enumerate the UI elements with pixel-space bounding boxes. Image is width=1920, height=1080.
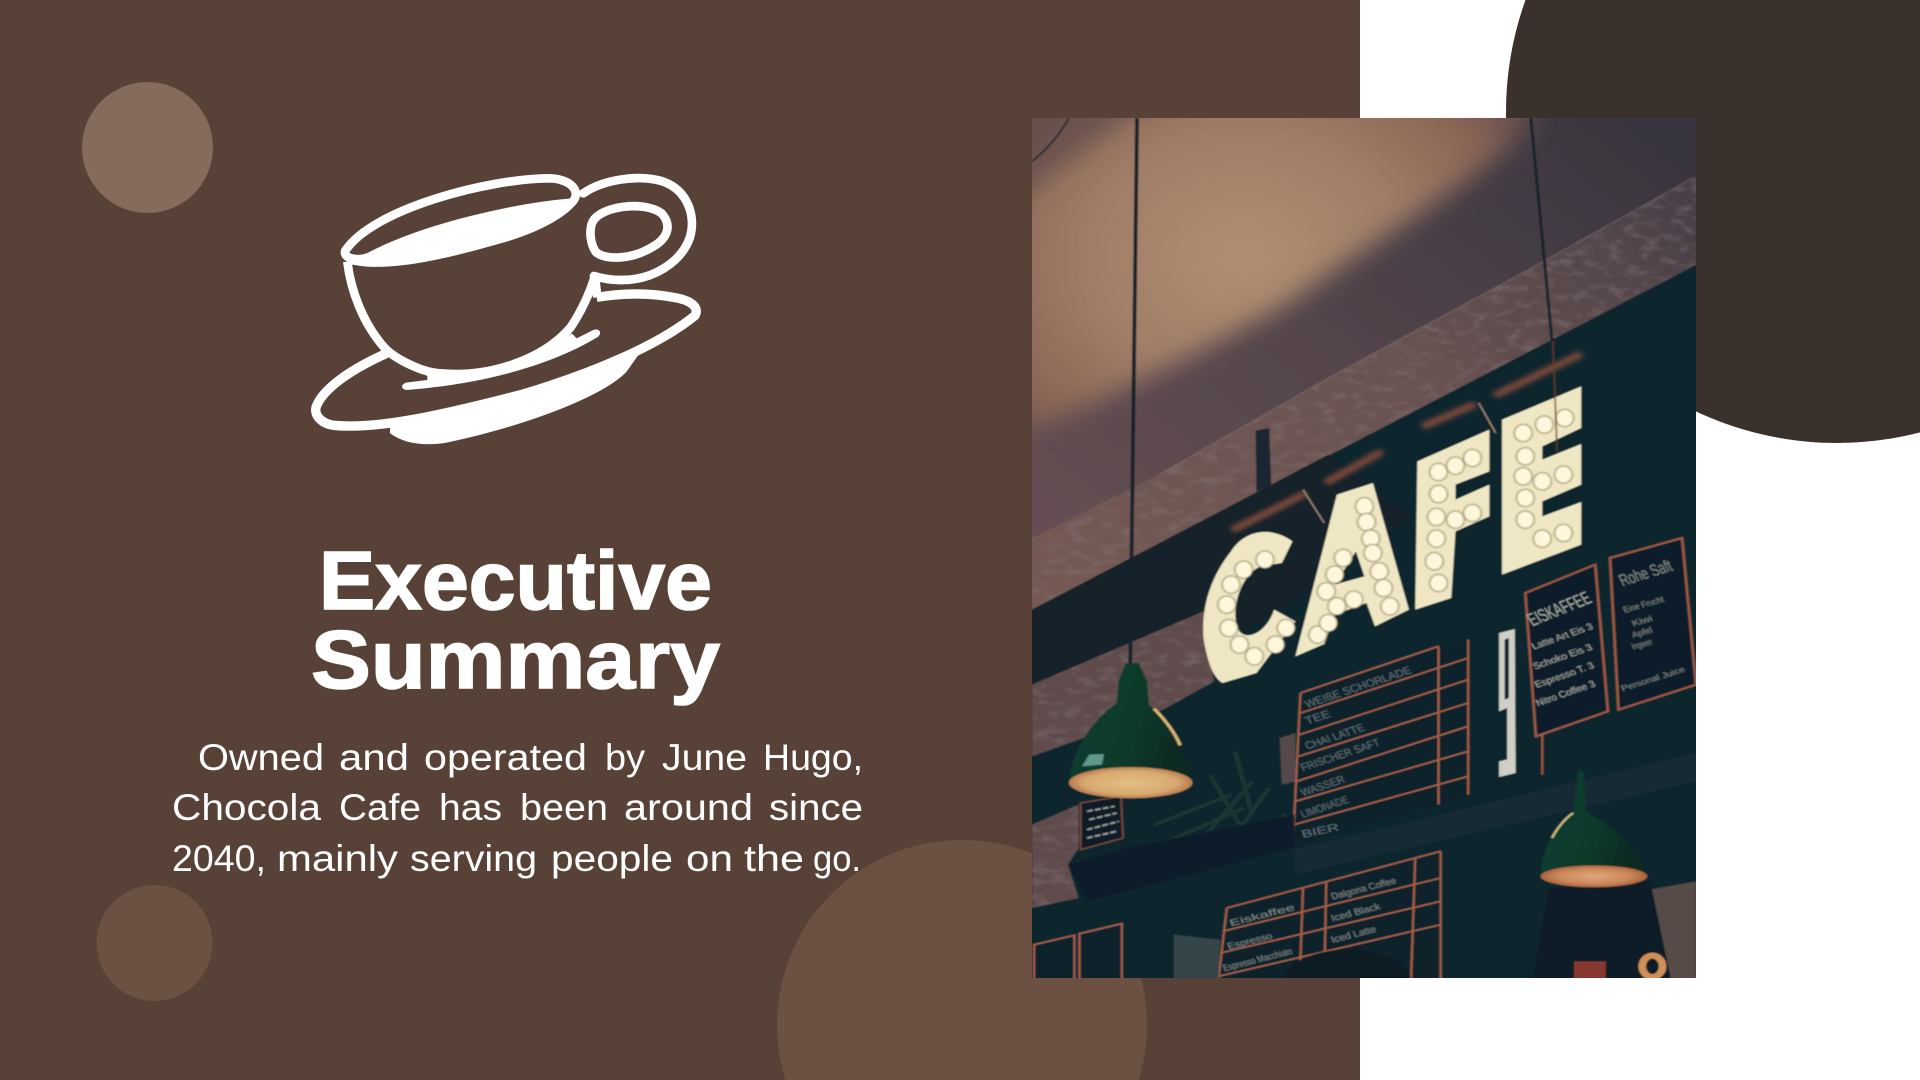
photo: cafe sign interior [1032,118,1696,978]
circle: lower left [96,885,212,1001]
menu board: bottom: Espresso [1226,931,1274,952]
small sign near lamp [1081,796,1123,850]
menu board: bottom: Iced Black [1330,901,1383,924]
body text: June [662,737,747,778]
menu board: right: Ingwer [1630,637,1655,652]
menu board: drinks: LIMONADE [1298,794,1351,820]
menu board: drinks: WEIßE SCHORLADE [1302,664,1414,710]
circle: top left [82,82,213,213]
body text: Chocola [172,787,321,828]
menu board: right: Personal Juice [1619,665,1686,693]
menu board: drinks [1293,640,1468,845]
lower photo group [1034,118,1696,1013]
menu board: bottom: Iced Latte [1330,924,1378,945]
menu board: eiskaffee: Schoko Eis 3 [1531,642,1595,672]
icon: coffee cup and saucer [316,178,696,444]
menu board: drinks: CHAI LATTE [1302,721,1367,752]
menu board: eiskaffee: Espresso T. 3 [1533,660,1596,690]
body text: 2040, [172,838,266,879]
body text: Hugo, [763,737,863,778]
menu board: bottom [1218,851,1441,981]
menu board: right: Eine Frucht [1622,595,1666,615]
concrete texture [1032,168,1696,618]
body text: people [551,838,673,879]
warm glow strips [1235,355,1578,529]
cup rim [345,178,576,259]
board leg [1540,735,1545,775]
menu board: bottom: Dalgona Coffee [1330,876,1398,902]
menu board: eiskaffee [1523,565,1608,736]
menu board: drinks: BIER [1300,821,1341,841]
sign wires [1303,403,1496,523]
left lamp [1069,118,1192,798]
menu board: drinks: TEE [1302,708,1333,727]
menu board: drinks: FRISCHER SAFT [1298,736,1383,774]
menu board: bottom: Espresso Macchiato [1222,946,1294,974]
saucer outline [316,294,696,426]
cup bowl [347,262,597,374]
door patch [1174,935,1220,981]
body text: Cafe [339,787,421,828]
body text: and [339,737,409,778]
menu board: bottom: Eiskaffee [1228,902,1297,929]
letter C [1203,532,1295,683]
title: Summary [311,613,720,706]
number nine [1499,629,1516,777]
patch texture [1032,621,1211,908]
cup handle outer [583,178,692,280]
menu board: right: Rohe Saft [1616,557,1676,590]
menu board: right [1610,538,1696,710]
body text: has [439,787,502,828]
orange number [1642,956,1663,977]
beam edge [1159,178,1693,475]
menu board: eiskaffee: Latte Art Eis 3 [1530,621,1595,652]
menu board: drinks: WASSER [1298,773,1347,799]
coffee surface highlight [350,198,579,267]
body text: on [686,838,733,879]
cup handle inner [590,206,667,258]
menu board: eiskaffee: EISKAFFEE [1523,588,1595,630]
letter F [1415,430,1489,610]
sign letters [1203,386,1581,683]
hanging wire [1032,118,1069,161]
body text: been [520,787,608,828]
menu board: eiskaffee: Nitro Coffee 3 [1534,679,1597,709]
body text [172,737,863,879]
wall base [1024,111,1704,611]
dark top left corner [1032,118,1145,200]
body text: go. [813,838,861,879]
saucer thick rim [390,355,638,444]
letter A [1295,483,1409,656]
circle: large bottom [777,840,1147,1080]
dark sign band [1024,261,1704,985]
head silhouette [1284,950,1411,1013]
body text: serving [410,838,537,879]
body text: around [624,787,753,828]
dark block under lamp [1532,881,1671,981]
concrete beam [1032,176,1696,610]
sign bulbs [1218,409,1574,665]
dark upper band left [1032,454,1413,684]
menu board: right: Kiwi [1630,614,1654,629]
letter E [1502,386,1581,575]
title: Executive [319,534,712,627]
shelf box [1068,815,1295,901]
plant [1154,751,1288,840]
bright wall behind plant [1280,733,1295,785]
right concrete corner [1650,881,1696,985]
body text: by [605,737,646,778]
circle: dark top right [1506,0,1920,443]
saucer inner shadow [395,330,600,390]
lit ceiling [1032,118,1544,433]
bracket [1256,428,1271,492]
red label [1574,961,1606,981]
right lamp [1531,118,1647,887]
body text: the [744,838,804,879]
body text: since [769,787,863,828]
shelf band [1295,753,1696,875]
body text: operated [424,737,587,778]
title [311,534,720,706]
lower concrete patches [1032,611,1214,908]
menu board: right: Apfel [1630,626,1654,640]
menu board: bottom left [1034,924,1122,981]
body text: mainly [277,838,399,879]
body text: Owned [198,737,324,778]
background: brown panel [0,0,1360,1080]
